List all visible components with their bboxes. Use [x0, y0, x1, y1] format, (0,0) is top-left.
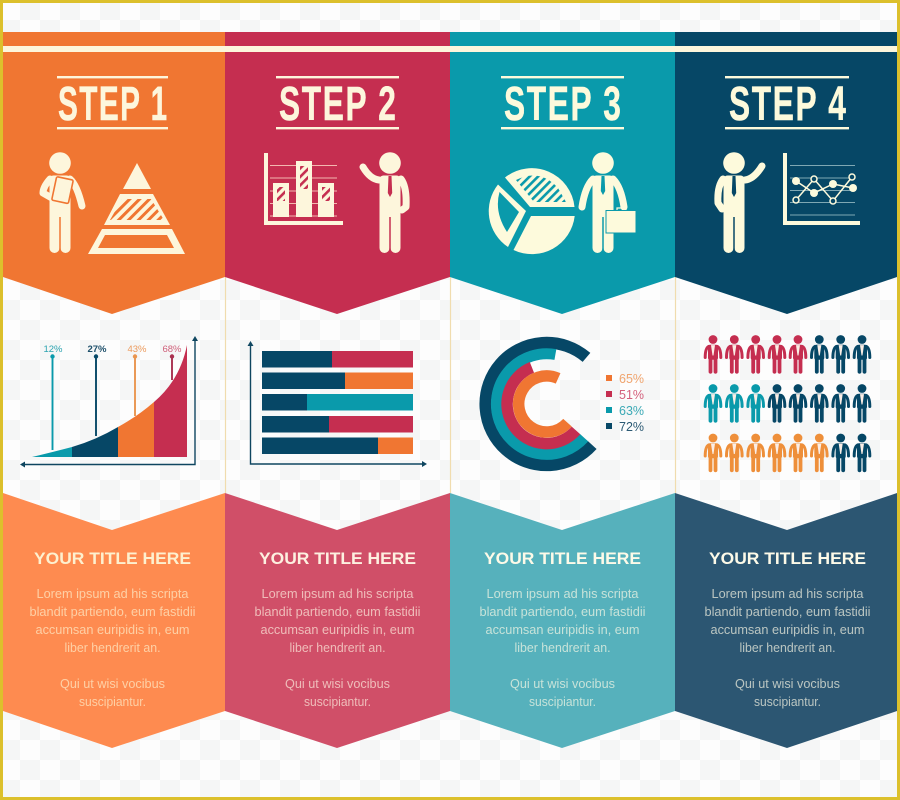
body text: step 4: suscipiantur. [754, 695, 821, 709]
body text: step 2: suscipiantur. [304, 695, 371, 709]
body text: step 1: liber hendrerit an. [64, 641, 160, 655]
body text: step 1 [30, 587, 196, 709]
heading: step 4: STEP 4 [729, 76, 846, 131]
title: step 4: YOUR TITLE HERE [709, 550, 866, 568]
body text: step 3: liber hendrerit an. [514, 641, 610, 655]
icon: presenter [363, 152, 406, 255]
body text: step 3: accumsan euripidis in, eum [486, 623, 640, 637]
body text: step 1: accumsan euripidis in, eum [36, 623, 190, 637]
panel: step 3 text [450, 493, 675, 748]
body text: step 3: Lorem ipsum ad his scripta [486, 587, 638, 601]
chart: stacked horizontal bars [248, 341, 427, 467]
title: step 1: YOUR TITLE HERE [34, 550, 191, 568]
icon: bar chart [264, 153, 343, 225]
icon: pyramid [88, 163, 185, 254]
chart: area curve with percentages: 43% [127, 344, 147, 355]
body text: step 1: suscipiantur. [79, 695, 146, 709]
body text: step 2: accumsan euripidis in, eum [260, 623, 414, 637]
legend: radial rings [606, 372, 644, 434]
chart: radial rings [485, 343, 592, 465]
icon: person with tablet [43, 152, 82, 255]
body text: step 2: Lorem ipsum ad his scripta [262, 587, 414, 601]
body text: step 2: liber hendrerit an. [290, 641, 386, 655]
chart: area curve with percentages: 27% [87, 344, 107, 355]
body text: step 1: Lorem ipsum ad his scripta [36, 587, 188, 601]
panel: step 2 header [225, 32, 450, 314]
body text: step 4: liber hendrerit an. [740, 641, 836, 655]
body text: step 2 [254, 587, 420, 709]
chart: area curve with percentages: 68% [162, 344, 182, 355]
body text: step 3: blandit partiendo, eum fastidii [480, 605, 646, 619]
icon: line chart [783, 153, 860, 225]
icon: presenter [718, 152, 762, 255]
title: step 3: YOUR TITLE HERE [484, 550, 641, 568]
body text: step 2: Qui ut wisi vocibus [285, 677, 390, 691]
heading: step 3: STEP 3 [504, 76, 621, 131]
panel: step 4 text [675, 493, 897, 748]
legend: radial rings: 63% [619, 404, 644, 418]
chart: people pictogram [705, 335, 870, 470]
title: step 2: YOUR TITLE HERE [259, 550, 416, 568]
body text: step 4 [704, 587, 870, 709]
heading: step 1: STEP 1 [58, 78, 167, 131]
panel: step 1 header [3, 32, 225, 314]
panel: step 3 header [450, 32, 675, 314]
panel: step 2 text [225, 493, 450, 748]
icon: person with briefcase [582, 152, 636, 255]
body text: step 3 [480, 587, 646, 709]
body text: step 1: Qui ut wisi vocibus [60, 677, 165, 691]
body text: step 4: blandit partiendo, eum fastidii [704, 605, 870, 619]
chart: area curve with percentages: 12% [43, 344, 63, 355]
legend: radial rings: 72% [619, 420, 644, 434]
body text: step 4: Lorem ipsum ad his scripta [712, 587, 864, 601]
body text: step 3: suscipiantur. [529, 695, 596, 709]
body text: step 4: Qui ut wisi vocibus [735, 677, 840, 691]
legend: radial rings: 65% [619, 372, 644, 386]
icon: pie chart [489, 168, 575, 254]
panel: step 4 header [675, 32, 897, 314]
body text: step 1: blandit partiendo, eum fastidii [30, 605, 196, 619]
body text: step 3: Qui ut wisi vocibus [510, 677, 615, 691]
body text: step 2: blandit partiendo, eum fastidii [254, 605, 420, 619]
legend: radial rings: 51% [619, 388, 644, 402]
heading: step 2: STEP 2 [279, 76, 396, 131]
body text: step 4: accumsan euripidis in, eum [710, 623, 864, 637]
chart: area curve with percentages [20, 336, 198, 468]
panel: step 1 text [3, 493, 225, 748]
